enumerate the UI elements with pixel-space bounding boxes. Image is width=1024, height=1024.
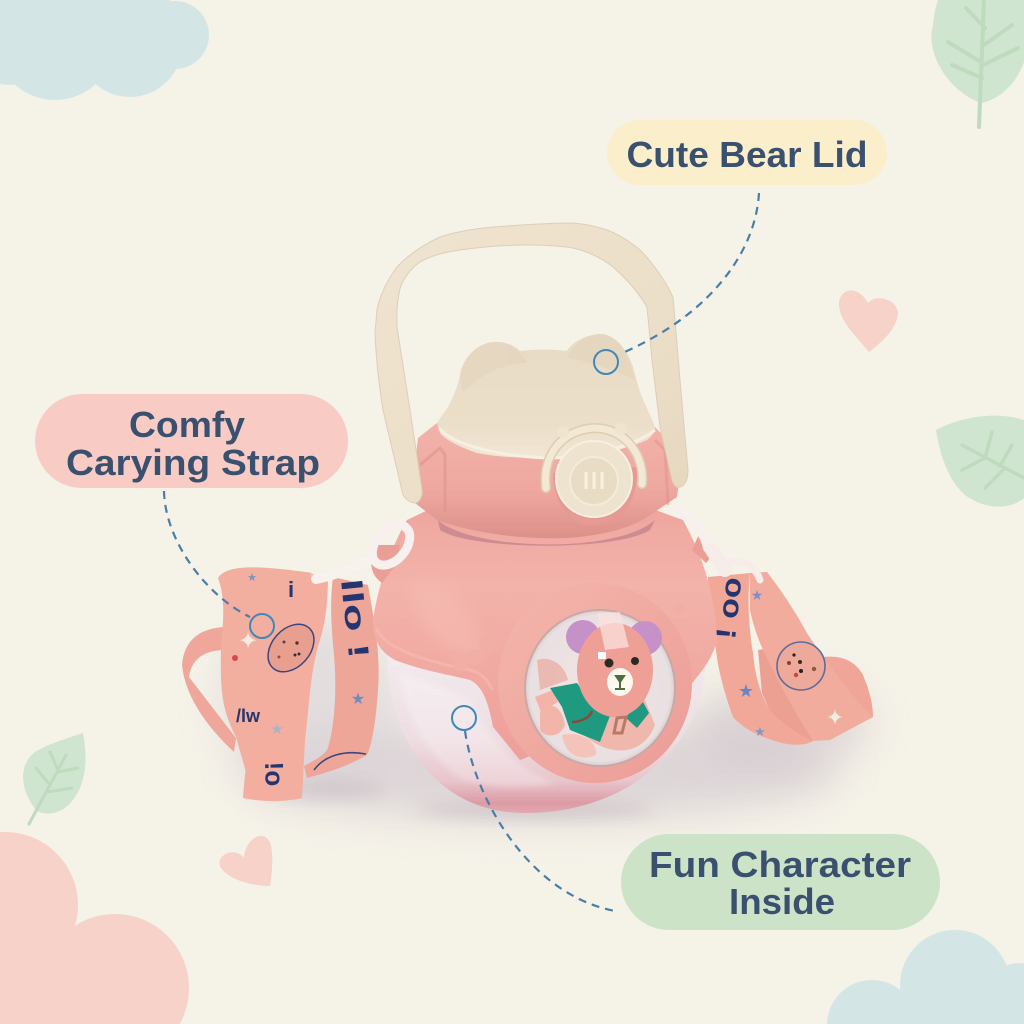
handle bbox=[375, 223, 688, 503]
outer band bbox=[750, 572, 873, 741]
bear face arc bbox=[314, 753, 366, 770]
thin back loop bbox=[182, 627, 236, 752]
stars: ✦ bbox=[238, 627, 258, 655]
neck lens bbox=[438, 520, 655, 546]
back band bbox=[218, 567, 312, 772]
bear ears bbox=[566, 620, 600, 654]
left clip bbox=[316, 518, 417, 583]
button cap bbox=[556, 441, 632, 517]
glass highlights bbox=[400, 672, 555, 787]
decoration: leaf right bbox=[936, 416, 1024, 507]
left strap: !o bbox=[259, 761, 290, 787]
decoration: cloud top left bbox=[0, 0, 209, 100]
button frame bbox=[545, 428, 642, 488]
bear shirt bbox=[550, 683, 611, 742]
left strap bbox=[182, 567, 379, 801]
bear figure bbox=[535, 612, 662, 758]
collar bbox=[415, 423, 682, 538]
back loop bbox=[823, 657, 873, 723]
sleeve rim bbox=[376, 628, 492, 690]
button base bbox=[553, 467, 637, 525]
right strap: ★ bbox=[751, 588, 763, 604]
left strap: /lw bbox=[236, 706, 261, 726]
strap lettering: ! oo bbox=[710, 576, 747, 641]
product shadow bbox=[220, 615, 870, 820]
button bbox=[545, 423, 642, 525]
inner back band bbox=[758, 648, 817, 744]
bear face bbox=[604, 658, 614, 668]
right clip bbox=[681, 512, 760, 580]
left strap: ★ bbox=[351, 689, 365, 708]
callout: fun character inside: Fun Character bbox=[649, 844, 911, 885]
decoration: heart bottom left bbox=[219, 836, 272, 886]
bumps bbox=[453, 603, 694, 671]
bear face on strap bbox=[777, 642, 825, 690]
lid rim bbox=[439, 428, 655, 458]
left strap: i bbox=[288, 577, 294, 602]
back shape in window bbox=[537, 659, 568, 690]
decoration: cloud bottom right bbox=[827, 930, 1024, 1024]
bear body bbox=[568, 690, 655, 750]
shoulder facet bbox=[410, 583, 483, 656]
lid ear shading bbox=[460, 334, 635, 392]
left strap: ★ bbox=[247, 571, 257, 584]
window bbox=[525, 610, 675, 766]
right strap: ✦ bbox=[826, 706, 844, 731]
lid bbox=[437, 334, 655, 458]
hello band bbox=[708, 573, 813, 745]
front band bbox=[243, 574, 328, 801]
callout: comfy carrying strap: Comfy bbox=[129, 404, 245, 445]
pink shoulder bbox=[373, 490, 717, 760]
decoration: leaf left bbox=[23, 733, 85, 824]
bear head bbox=[577, 623, 653, 717]
bottle bbox=[316, 223, 760, 813]
right strap: ★ bbox=[754, 725, 766, 740]
callout: comfy carrying strap bbox=[35, 394, 348, 638]
decoration: heart top right bbox=[839, 290, 898, 352]
callout: fun character inside bbox=[452, 706, 940, 930]
bear arm bbox=[535, 690, 558, 712]
hello band bbox=[304, 577, 379, 778]
right strap bbox=[708, 572, 873, 745]
left strap: ★ bbox=[270, 720, 284, 738]
strap lettering: llo ! bbox=[334, 577, 374, 660]
callout: cute bear lid: Cute Bear Lid bbox=[626, 134, 868, 175]
decoration: pink cloud bottom left bbox=[0, 832, 189, 1024]
collar ribs bbox=[420, 448, 445, 512]
callout: comfy carrying strap: Carying Strap bbox=[66, 442, 320, 483]
clear base bbox=[387, 650, 706, 813]
bear face on strap bbox=[259, 615, 323, 681]
visor highlight bbox=[597, 612, 629, 650]
decoration: leaf top right bbox=[931, 0, 1024, 127]
window ring bbox=[498, 583, 692, 783]
stars: ★ bbox=[738, 681, 754, 702]
callout: cute bear lid bbox=[594, 120, 887, 374]
callout: fun character inside: Inside bbox=[729, 881, 835, 922]
